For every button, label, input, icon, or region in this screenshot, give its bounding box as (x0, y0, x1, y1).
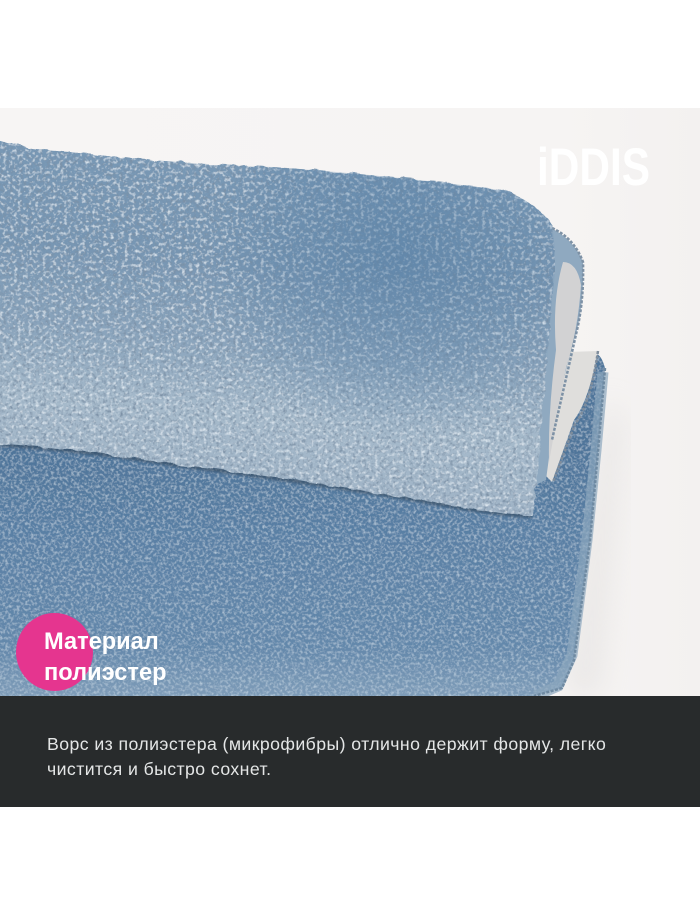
rolled mat body (0, 138, 555, 516)
photo: rolled blue bath mat (0, 108, 700, 696)
studio background (0, 108, 700, 696)
description text: Ворс из полиэстера (микрофибры) отлично держит форму, легко (47, 734, 606, 754)
badge: material (16, 613, 166, 691)
description text (47, 734, 606, 779)
badge text: Материал (44, 629, 159, 655)
description band (0, 696, 700, 807)
mat shadow on background (565, 400, 625, 696)
badge text (44, 629, 166, 686)
pink circle (16, 613, 93, 691)
dark contact shadow under roll (0, 444, 532, 516)
folded underside of mat (540, 351, 598, 482)
description text: чистится и быстро сохнет. (47, 759, 271, 779)
rolled mat end with backing (525, 225, 583, 490)
lower flat mat (0, 354, 605, 696)
badge text: полиэстер (44, 660, 166, 686)
logo: IDDIS: iDDIS (537, 138, 650, 197)
